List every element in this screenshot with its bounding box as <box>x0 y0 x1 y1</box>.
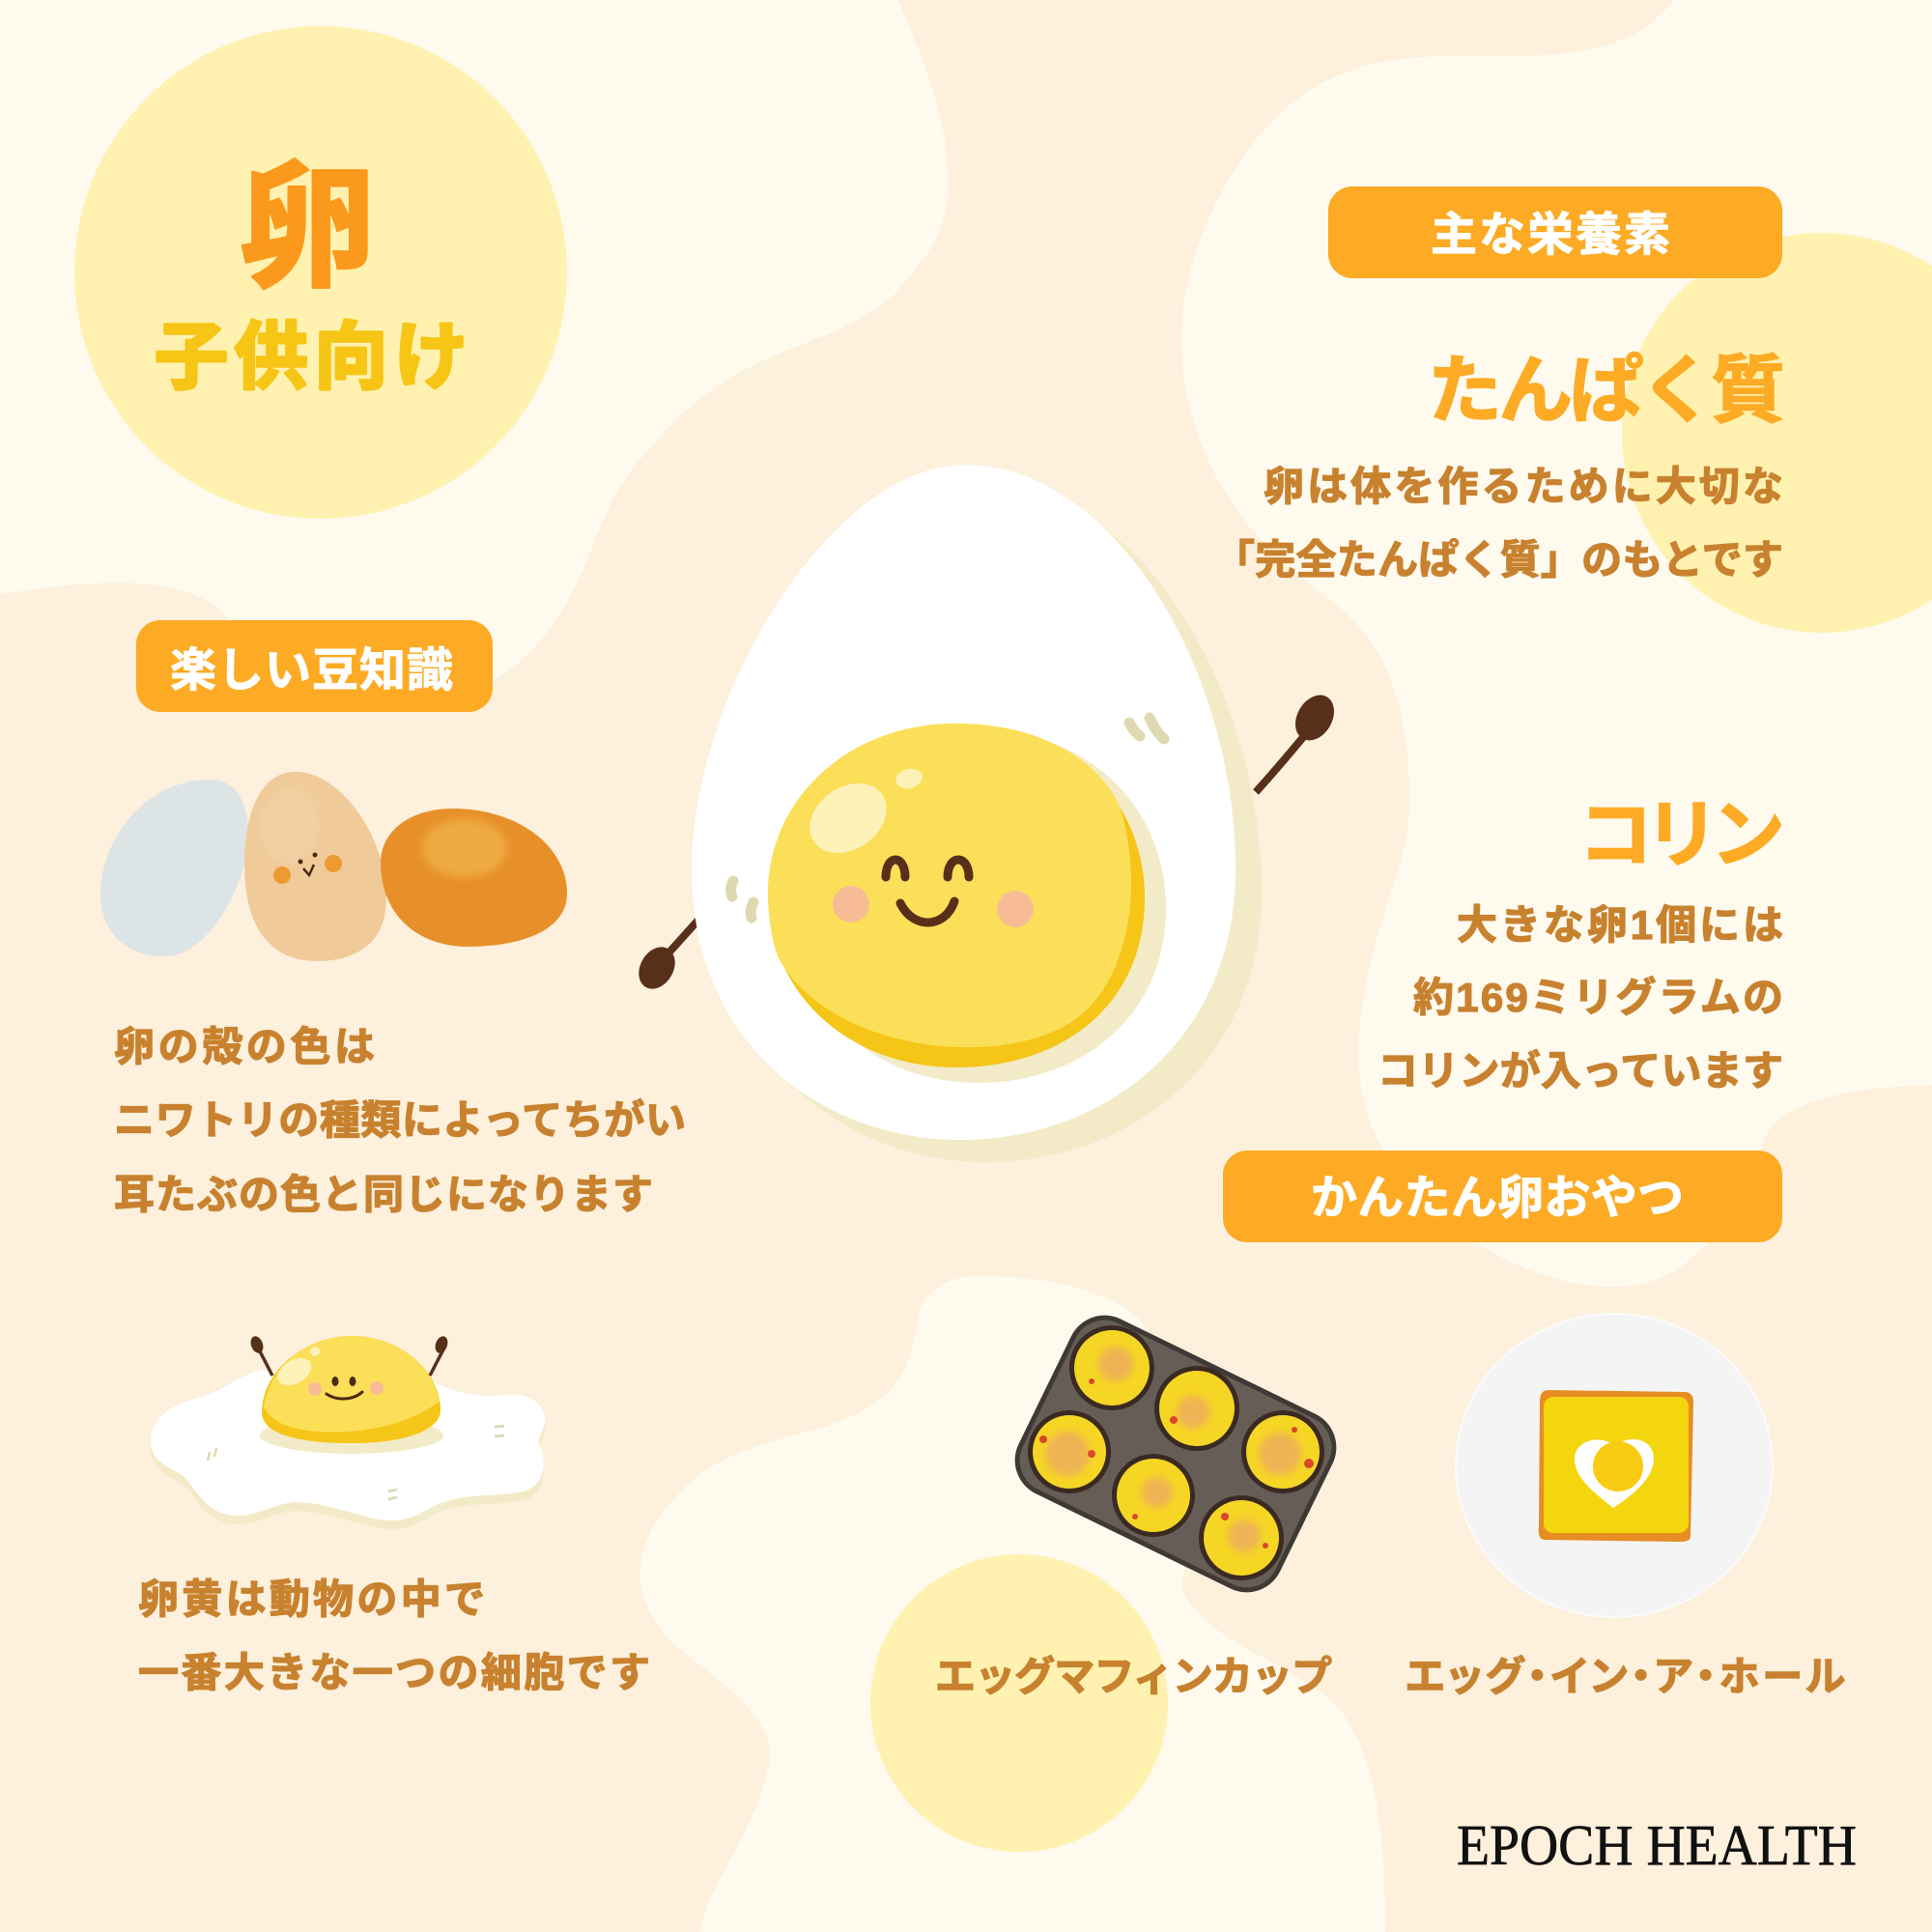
badge: main nutrients <box>1328 186 1782 278</box>
text: protein description: 「完全たんぱく質」のもとです <box>1214 537 1783 582</box>
photo: egg muffin tin <box>1006 1306 1346 1602</box>
subtitle: for kids: 子供向け <box>155 317 468 399</box>
background blob: bottom <box>640 1277 1385 1932</box>
text: shell color fact: ニワトリの種類によってちがい <box>114 1097 686 1143</box>
icon: three eggs <box>100 772 567 961</box>
title: egg: 卵 <box>239 152 376 305</box>
circle: right accent <box>1622 233 1932 633</box>
heading: choline: コリン <box>1578 794 1785 877</box>
heading: protein: たんぱく質 <box>1428 350 1785 433</box>
highlights <box>796 766 924 867</box>
icon: fried egg character <box>151 1334 545 1529</box>
label: egg muffin cups: エッグマフィンカップ <box>935 1654 1332 1699</box>
right arm <box>1256 688 1342 792</box>
circle: title backdrop <box>74 26 567 519</box>
text: choline description <box>1378 902 1783 1094</box>
text: yolk fact <box>138 1577 650 1695</box>
badge: fun facts: 楽しい豆知識 <box>170 645 453 696</box>
text: choline description: 大きな卵1個には <box>1457 902 1783 948</box>
yolk shadow <box>789 730 1166 1083</box>
text: shell color fact: 卵の殻の色は <box>114 1024 375 1069</box>
label: egg in a hole: エッグ・イン・ア・ホール <box>1406 1654 1845 1699</box>
text: yolk fact: 一番大きな一つの細胞です <box>138 1650 650 1695</box>
circle: bottom accent <box>870 1554 1168 1852</box>
text: yolk fact: 卵黄は動物の中で <box>138 1577 485 1622</box>
badge: easy egg snacks: かんたん卵おやつ <box>1311 1173 1684 1224</box>
egg shadow <box>718 487 1262 1162</box>
logo: Epoch Health: EPOCH HEALTH <box>1457 1813 1857 1877</box>
egg white <box>692 465 1236 1140</box>
badge: easy egg snacks <box>1223 1151 1782 1242</box>
motion dashes <box>731 718 1164 918</box>
illustration: boiled egg character <box>632 465 1342 1162</box>
text: choline description: 約169ミリグラムの <box>1413 975 1783 1020</box>
badge: main nutrients: 主な栄養素 <box>1431 210 1670 261</box>
photo: egg in a hole on plate <box>1456 1314 1773 1617</box>
text: shell color fact: 耳たぶの色と同じになります <box>114 1172 653 1217</box>
yolk base <box>768 724 1145 1067</box>
background blob: top left <box>0 0 948 681</box>
background blob: right <box>1181 0 1932 1287</box>
text: protein description <box>1214 464 1783 582</box>
face <box>833 860 1034 927</box>
text: shell color fact <box>114 1024 686 1217</box>
blue egg <box>100 780 248 956</box>
badge: fun facts <box>136 620 493 712</box>
text: protein description: 卵は体を作るために大切な <box>1264 464 1783 509</box>
yolk top <box>768 724 1131 1047</box>
text: choline description: コリンが入っています <box>1378 1048 1783 1094</box>
orange egg <box>381 809 567 947</box>
tan egg with face <box>244 772 386 961</box>
left arm <box>632 918 700 995</box>
